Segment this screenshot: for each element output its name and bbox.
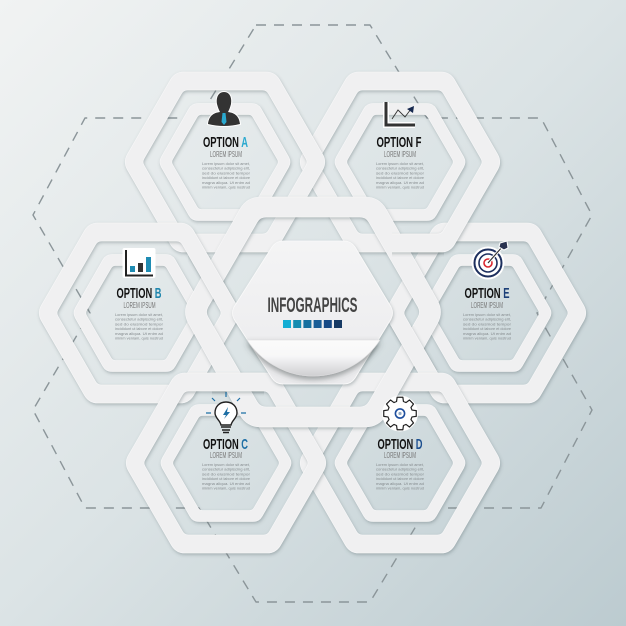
option E text: sed do eiusmod tempor [463, 321, 512, 326]
option D text: LOREM IPSUM [384, 451, 416, 460]
paper peel [247, 340, 380, 376]
option A text: sed do eiusmod tempor [202, 170, 251, 175]
weave overlay: C top strip [212, 372, 264, 394]
icon: gear [382, 396, 418, 432]
weave overlay: F bottom strip [392, 234, 444, 256]
option B text [115, 285, 164, 340]
option A text: magna aliqua. Ut enim ad [202, 180, 250, 185]
weave overlay: E lower-left diagonal [390, 326, 438, 370]
option C text: sed do eiusmod tempor [202, 471, 251, 476]
outer ring: option E [386, 223, 586, 403]
option B text: minim veniam, quis nostrud [115, 336, 163, 340]
option E text: minim veniam, quis nostrud [463, 336, 511, 340]
option A text: LOREM IPSUM [210, 150, 242, 159]
icon: light bulb [206, 392, 246, 432]
option E text: Lorem ipsum dolor sit amet, [463, 312, 511, 317]
option D text: incididunt ut labore et dolore [376, 476, 425, 481]
option C text: LOREM IPSUM [210, 451, 242, 460]
option D text: magna aliqua. Ut enim ad [376, 481, 424, 486]
option C text [202, 436, 251, 490]
option C text: minim veniam, quis nostrud [202, 486, 250, 490]
infographics title: INFOGRAPHICS [268, 294, 358, 317]
option A text [202, 134, 251, 190]
central ring [186, 197, 440, 427]
option D text [376, 436, 425, 490]
option A text: OPTION A [203, 134, 248, 151]
option E text: LOREM IPSUM [471, 301, 503, 310]
option D text: OPTION D [378, 436, 423, 453]
option C text: Lorem ipsum dolor sit amet, [202, 462, 250, 467]
option F text: consectetur adipiscing elit, [376, 166, 424, 171]
option E text: incididunt ut labore et dolore [463, 326, 512, 331]
option E text [463, 285, 512, 340]
option B text: magna aliqua. Ut enim ad [115, 331, 163, 336]
option B text: Lorem ipsum dolor sit amet, [115, 312, 163, 317]
option F text [376, 134, 425, 190]
outer ring: option F [300, 72, 500, 252]
icon: target [472, 241, 508, 280]
option A text: consectetur adipiscing elit, [202, 166, 250, 171]
option F text: Lorem ipsum dolor sit amet, [376, 161, 424, 166]
option A text: Lorem ipsum dolor sit amet, [202, 161, 250, 166]
option B text: incididunt ut labore et dolore [115, 326, 164, 331]
option B text: LOREM IPSUM [124, 301, 156, 310]
option D text: Lorem ipsum dolor sit amet, [376, 462, 424, 467]
option B text: consectetur adipiscing elit, [115, 317, 163, 322]
option B text: sed do eiusmod tempor [115, 321, 164, 326]
central hexagon panel [232, 241, 392, 384]
option A text: minim veniam, quis nostrud [202, 184, 250, 190]
outer ring: option D [300, 373, 500, 553]
option D text: minim veniam, quis nostrud [376, 486, 424, 490]
option E text: magna aliqua. Ut enim ad [463, 331, 511, 336]
option F text: sed do eiusmod tempor [376, 170, 425, 175]
weave overlay: B upper-right diagonal [188, 256, 236, 302]
option B text: OPTION B [116, 285, 162, 302]
icon: bar chart [122, 248, 156, 278]
option E text: OPTION E [464, 285, 510, 302]
option E text: consectetur adipiscing elit, [463, 317, 511, 322]
option D text: sed do eiusmod tempor [376, 471, 425, 476]
outer ring: option B [39, 223, 239, 403]
colour squares [283, 320, 342, 328]
option A text: incididunt ut labore et dolore [202, 175, 251, 180]
option D text: consectetur adipiscing elit, [376, 467, 424, 472]
option F text: magna aliqua. Ut enim ad [376, 180, 424, 185]
outer ring: option C [126, 373, 326, 553]
option F text: incididunt ut labore et dolore [376, 175, 425, 180]
option C text: consectetur adipiscing elit, [202, 467, 250, 472]
option F text: minim veniam, quis nostrud [376, 184, 424, 190]
option C text: OPTION C [203, 436, 248, 453]
icon: growth chart [386, 102, 415, 125]
option F text: LOREM IPSUM [384, 150, 416, 159]
option C text: magna aliqua. Ut enim ad [202, 481, 250, 486]
inner rings [74, 104, 551, 522]
icon: businessman [208, 92, 240, 126]
option F text: OPTION F [376, 134, 422, 151]
outer ring: option A [125, 72, 325, 252]
option C text: incididunt ut labore et dolore [202, 476, 251, 481]
